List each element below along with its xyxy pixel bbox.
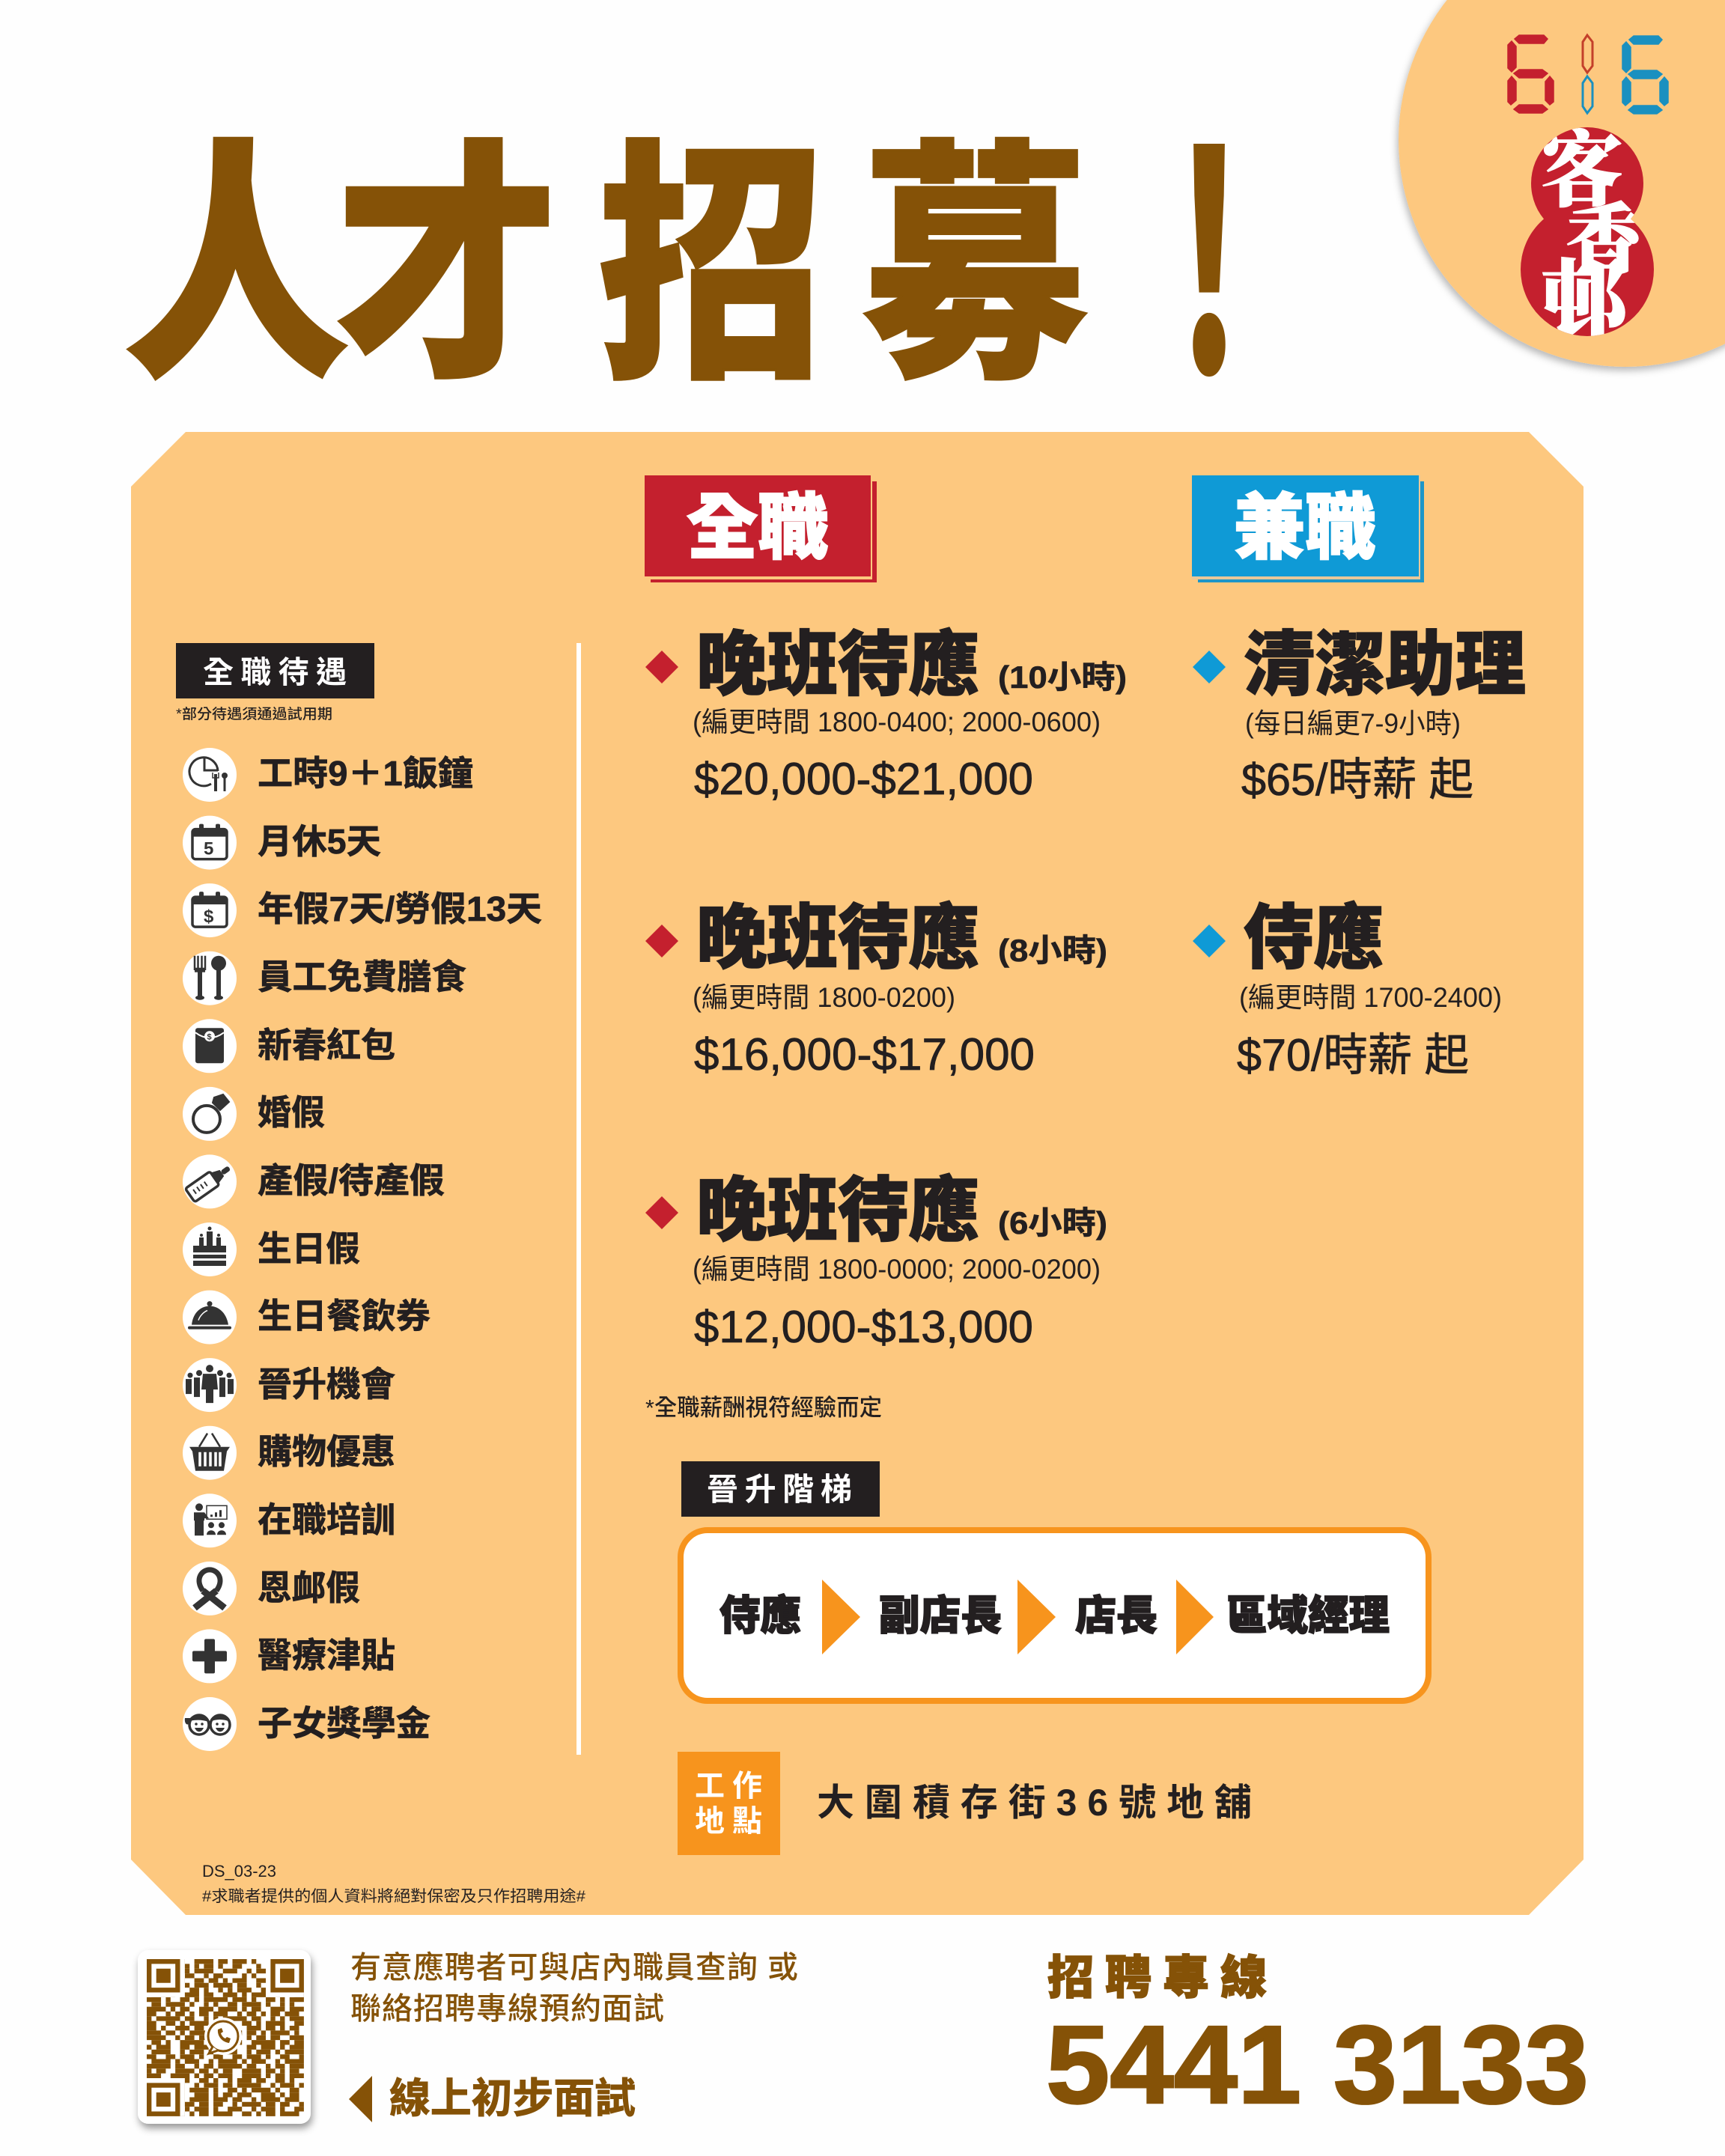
benefit: training: 在職培訓 <box>258 1500 395 1539</box>
logo seal: 邨 <box>1541 231 1629 358</box>
benefit: medical allowance <box>183 1629 395 1683</box>
logo seal: 香 <box>1566 180 1644 289</box>
benefit: monthly days off: 月休5天 <box>258 822 381 861</box>
benefits heading <box>176 643 374 698</box>
benefits heading: 全職待遇 <box>203 655 347 689</box>
job: evening waiter 10h: (編更時間 1800-0400; 2000-0600) <box>693 707 1101 737</box>
promotion ladder heading: 晉升階梯 <box>707 1472 852 1507</box>
reference code: DS_03-23 <box>202 1862 276 1881</box>
benefit: hours: 工時9＋1飯鐘 <box>258 754 473 793</box>
hotline number: 5441 3133 <box>1046 2003 1589 2127</box>
workplace label: 地點 <box>695 1805 762 1838</box>
benefit: compassionate leave <box>183 1562 360 1616</box>
job: evening waiter 6h: (6小時) <box>998 1205 1107 1240</box>
badge: part-time <box>1192 475 1424 582</box>
arrow <box>1176 1580 1214 1654</box>
workplace label <box>678 1752 780 1855</box>
icon: red diamond <box>645 1196 678 1229</box>
benefit: promotion <box>183 1358 395 1412</box>
benefit: red packet <box>183 1019 395 1073</box>
workplace label: 工作 <box>695 1770 762 1803</box>
benefit: annual leave: 年假7天/勞假13天 <box>258 889 542 928</box>
benefit: annual leave <box>183 883 542 937</box>
benefit: medical allowance: 醫療津貼 <box>258 1636 395 1675</box>
logo digit: split 1 <box>1583 35 1592 113</box>
icon: red diamond <box>645 925 678 957</box>
arrow <box>1017 1580 1056 1654</box>
benefit: birthday voucher <box>183 1291 431 1345</box>
benefit: training <box>183 1493 395 1547</box>
logo digit: blue 6 <box>1622 36 1668 114</box>
benefit: wedding leave: 婚假 <box>258 1093 325 1132</box>
job: evening waiter 6h: $12,000-$13,000 <box>694 1302 1033 1352</box>
benefit: promotion: 晉升機會 <box>258 1365 395 1404</box>
job: evening waiter 8h: $16,000-$17,000 <box>694 1029 1035 1079</box>
promotion ladder: 區域經理 <box>1226 1592 1390 1639</box>
apply text: 聯絡招聘專線預約面試 <box>350 1991 664 2026</box>
job: evening waiter 6h <box>645 1171 1107 1352</box>
job: evening waiter 8h: (編更時間 1800-0200) <box>693 982 955 1013</box>
benefit: wedding leave <box>183 1087 325 1141</box>
privacy note: #求職者提供的個人資料將絕對保密及只作招聘用途# <box>202 1888 585 1905</box>
benefit: annual leave: $ <box>204 907 214 927</box>
job: waiter: $70/時薪 起 <box>1237 1030 1469 1080</box>
logo: 616 badge <box>1399 0 1725 367</box>
job: evening waiter 10h <box>645 625 1127 804</box>
benefit: shopping discount <box>183 1426 395 1480</box>
benefit: maternity leave <box>183 1154 445 1208</box>
badge: full-time: 全職 <box>687 488 829 568</box>
benefit: hours <box>183 748 473 802</box>
icon: red diamond <box>645 651 678 683</box>
benefit: birthday leave: 生日假 <box>258 1229 360 1268</box>
benefit: birthday voucher: 生日餐飲券 <box>258 1297 431 1336</box>
job: evening waiter 8h: (8小時) <box>998 933 1107 968</box>
QR card <box>138 1950 311 2124</box>
job: evening waiter 8h: 晚班待應 <box>696 898 979 977</box>
job: cleaning assistant: $65/時薪 起 <box>1241 755 1473 805</box>
job: evening waiter 6h: (編更時間 1800-0000; 2000-0200) <box>693 1254 1101 1285</box>
arrow <box>822 1580 860 1654</box>
icon: blue diamond <box>1193 925 1226 957</box>
divider <box>576 643 581 1755</box>
promotion ladder heading <box>681 1461 880 1517</box>
benefit: compassionate leave: 恩䘏假 <box>258 1568 360 1607</box>
job: waiter: 侍應 <box>1244 898 1384 977</box>
promotion ladder: 店長 <box>1075 1592 1157 1639</box>
job: evening waiter 10h: $20,000-$21,000 <box>694 754 1033 804</box>
job: waiter: (編更時間 1700-2400) <box>1239 982 1502 1013</box>
job: cleaning assistant: 清潔助理 <box>1244 625 1526 704</box>
benefit: free meals: 員工免費膳食 <box>258 957 466 996</box>
pay note: *全職薪酬視符經驗而定 <box>645 1395 882 1421</box>
promotion ladder: 副店長 <box>879 1592 1002 1639</box>
arrow <box>349 2076 372 2122</box>
badge: part-time: 兼職 <box>1234 488 1376 568</box>
logo seal <box>1521 127 1654 336</box>
job: cleaning assistant: (每日編更7-9小時) <box>1245 708 1461 739</box>
benefit: maternity leave: 產假/待產假 <box>258 1161 445 1200</box>
online interview cta: 線上初步面試 <box>389 2075 636 2122</box>
icon: blue diamond <box>1193 651 1226 683</box>
title: 人才招募 <box>124 127 1088 410</box>
job: evening waiter 8h <box>645 898 1107 1079</box>
logo seal: 客 <box>1541 105 1623 223</box>
hotline label: 招聘專線 <box>1047 1952 1267 2004</box>
apply text: 有意應聘者可與店內職員查詢 或 <box>350 1950 798 1985</box>
benefits list <box>183 748 542 1751</box>
benefit: red packet: 新春紅包 <box>258 1026 395 1065</box>
job: cleaning assistant <box>1193 625 1526 805</box>
benefits note: *部分待遇須通過試用期 <box>176 706 332 722</box>
title <box>124 97 1286 436</box>
promotion ladder <box>681 1530 1429 1701</box>
icon: WhatsApp <box>204 2018 242 2055</box>
benefit: monthly days off <box>183 816 381 870</box>
benefit: children's scholarship: 子女獎學金 <box>258 1704 431 1743</box>
title: ！ <box>1133 97 1286 436</box>
benefit: children's scholarship <box>183 1697 431 1751</box>
promotion ladder: 侍應 <box>719 1592 801 1639</box>
logo digit: red 6 <box>1508 35 1554 113</box>
job: evening waiter 6h: 晚班待應 <box>696 1171 979 1249</box>
benefit: birthday leave <box>183 1222 360 1276</box>
badge: full-time <box>645 475 877 582</box>
main panel <box>131 432 1583 1915</box>
benefit: shopping discount: 購物優惠 <box>258 1432 395 1471</box>
apply text <box>350 1950 798 2026</box>
job: evening waiter 10h: (10小時) <box>998 660 1127 695</box>
job: waiter <box>1193 898 1502 1080</box>
benefit: red packet: $ <box>207 1032 212 1041</box>
workplace address: 大圍積存街36號地舖 <box>817 1782 1252 1824</box>
benefit: free meals <box>183 951 466 1005</box>
benefit: monthly days off: 5 <box>204 839 213 859</box>
job: evening waiter 10h: 晚班待應 <box>696 625 979 704</box>
